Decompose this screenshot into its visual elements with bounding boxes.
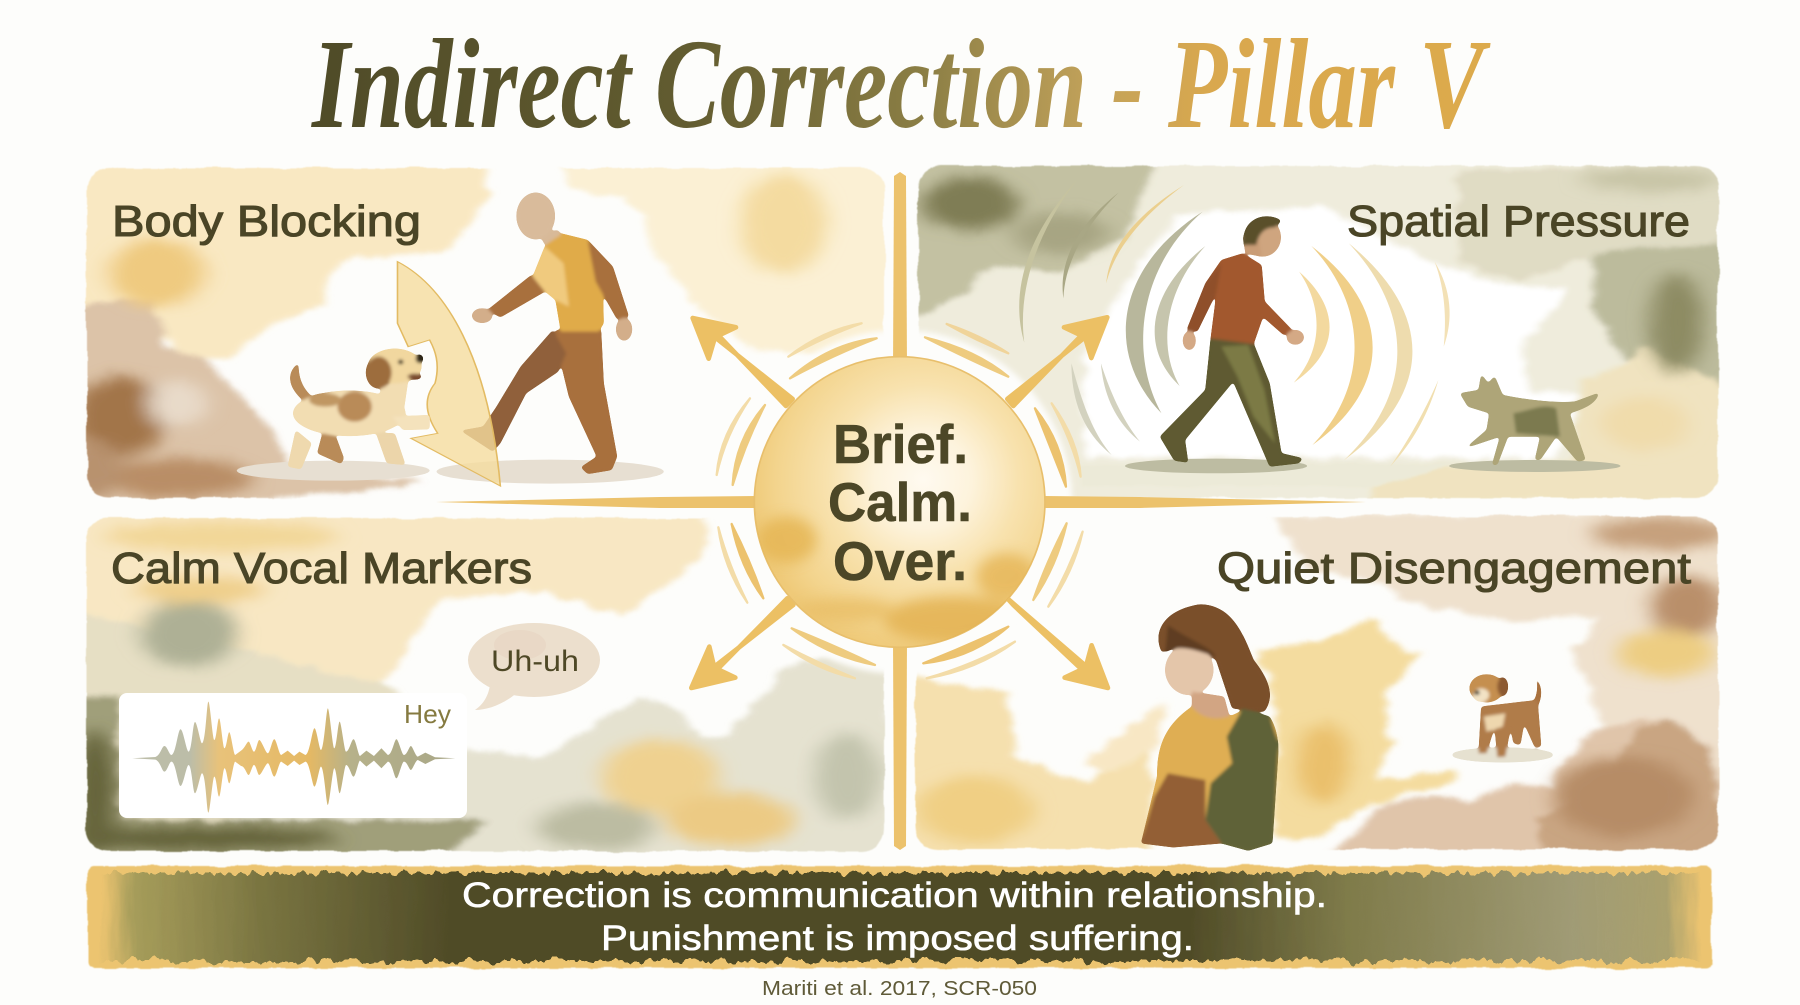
central hub with arrows [436, 172, 1366, 850]
heading: quiet disengagement: Quiet Disengagement [1217, 544, 1691, 593]
hub words: Over. [833, 530, 967, 592]
banner text: Correction is communication within relationship. [462, 876, 1327, 915]
puppy [288, 349, 430, 469]
waveform [132, 702, 455, 813]
calm vocal markers wash [60, 513, 890, 863]
hub words [828, 413, 972, 592]
pressure waves [1019, 180, 1450, 467]
quiet disengagement wash [905, 512, 1730, 857]
sun disc [754, 357, 1045, 647]
shield [397, 262, 500, 486]
ground shadow [1125, 459, 1621, 473]
ground shadows [237, 460, 664, 484]
closing statement banner [88, 866, 1712, 968]
heading: calm vocal markers: Calm Vocal Markers [111, 544, 532, 593]
waveform card [119, 693, 467, 818]
small dog [1452, 674, 1554, 762]
heading: spatial pressure: Spatial Pressure [1347, 197, 1690, 246]
walking person [1160, 216, 1304, 467]
speech bubble: uh-uh [468, 623, 600, 710]
arcs [717, 323, 1083, 678]
banner text [462, 876, 1327, 958]
panel: spatial pressure [905, 157, 1730, 503]
banner wash [88, 866, 1712, 968]
white halo around hub [728, 330, 1072, 674]
sun rays and arcs [691, 317, 1108, 688]
spokes [436, 172, 1366, 850]
hub words: Brief. [833, 413, 968, 475]
woman turned away [1141, 604, 1278, 851]
body blocking wash [60, 160, 896, 503]
panel: quiet disengagement [905, 512, 1730, 857]
speech bubble: uh-uh: Uh-uh [491, 645, 579, 678]
hub words: Calm. [828, 471, 972, 533]
panel: calm vocal markers [60, 513, 890, 863]
spatial pressure wash [905, 157, 1730, 503]
person stepping forward [461, 193, 632, 474]
heading: body blocking: Body Blocking [112, 197, 421, 246]
banner text: Punishment is imposed suffering. [601, 919, 1194, 958]
panel: body blocking [60, 160, 896, 503]
label: hey: Hey [404, 699, 451, 729]
citation: Mariti et al. 2017, SCR-050 [762, 978, 1037, 1000]
diagonal arrows [691, 317, 1108, 688]
dog silhouette [1460, 374, 1599, 465]
